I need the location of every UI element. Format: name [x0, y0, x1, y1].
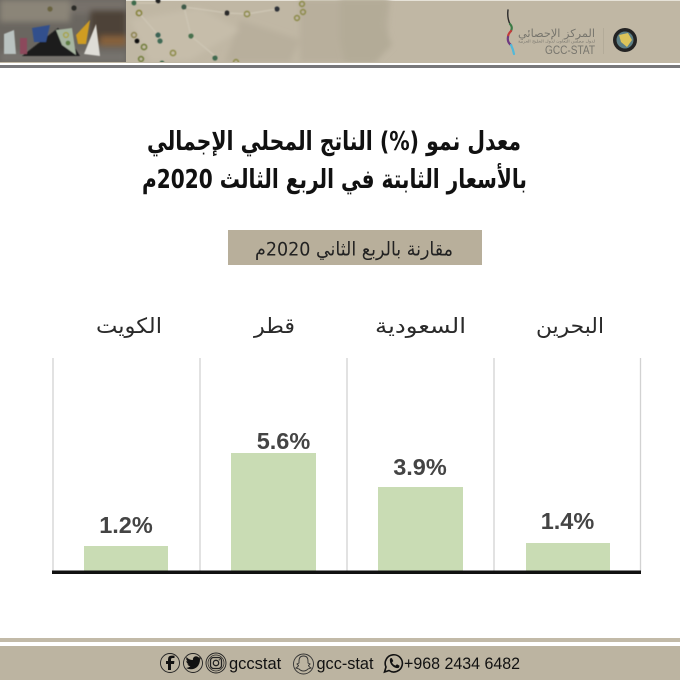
network map dots [132, 0, 305, 65]
chart axis [52, 570, 641, 574]
value: Qatar: 5.6% [257, 428, 310, 454]
title line 2: بالأسعار الثابتة في الربع الثالث 2020م [142, 163, 527, 195]
value: Saudi Arabia: 3.9% [393, 454, 447, 480]
value: Bahrain: 1.4% [541, 508, 594, 534]
country label: Bahrain: البحرين [536, 314, 604, 338]
text: handle gcc-stat: gcc-stat [316, 655, 374, 673]
dotted map block right [340, 0, 390, 55]
country label: Kuwait: الكويت [96, 314, 162, 338]
country label: Saudi Arabia: السعودية [375, 314, 466, 338]
title [142, 127, 527, 195]
icon: facebook [160, 654, 180, 672]
bar: Saudi Arabia [378, 487, 463, 572]
logo arabic name: المركز الإحصائي [518, 27, 595, 40]
title line 1: معدل نمو (%) الناتج المحلي الإجمالي [147, 127, 521, 157]
icon: twitter [184, 654, 202, 672]
logo: GCC-STAT [508, 10, 637, 57]
subtitle badge: مقارنة بالربع الثاني 2020م [255, 238, 453, 260]
bar: Bahrain [526, 543, 610, 572]
text: phone number: +968 2434 6482 [404, 655, 520, 673]
bar chart [52, 314, 641, 574]
logo subtitle: لدول مجلس التعاون لدول الخليج العربية [518, 38, 595, 44]
icon: whatsapp [384, 655, 402, 672]
logo emblem [613, 28, 637, 52]
header photo collage [0, 0, 126, 62]
text: handle gccstat: gccstat [229, 655, 282, 673]
value: Kuwait: 1.2% [99, 512, 153, 538]
logo wordmark: GCC-STAT [545, 45, 595, 57]
country label: Qatar: قطر [253, 314, 295, 338]
footer [0, 638, 680, 680]
logo ribbon [508, 10, 514, 54]
bar: Kuwait [84, 546, 168, 572]
header banner [0, 0, 680, 65]
icon: instagram [206, 653, 226, 673]
bar: Qatar [231, 453, 316, 572]
map texture [234, 0, 392, 56]
icon: snapchat [294, 654, 314, 674]
header bottom rule [0, 63, 680, 68]
subtitle badge [228, 230, 482, 265]
